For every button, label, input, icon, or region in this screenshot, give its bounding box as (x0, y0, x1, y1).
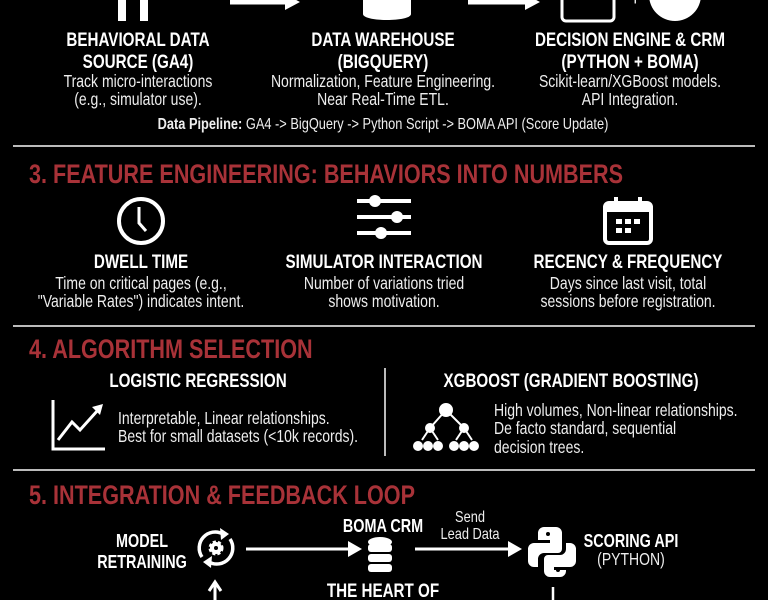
text: BOMA CRM (343, 516, 423, 536)
arrows and icons (246, 527, 576, 600)
text: Days since last visit, total (550, 273, 706, 293)
text: (PYTHON) (597, 549, 665, 569)
text: DECISION ENGINE & CRM (535, 30, 725, 51)
text: Best for small datasets (<10k records). (118, 426, 358, 446)
panel: pipeline stages (64, 30, 725, 109)
text: (e.g., simulator use). (74, 89, 202, 109)
heading: section 5: 5. INTEGRATION & FEEDBACK LOOP (29, 480, 415, 510)
text: LOGISTIC REGRESSION (109, 371, 287, 392)
text: Lead Data (440, 526, 500, 543)
text: De facto standard, sequential (494, 418, 676, 438)
text: Near Real-Time ETL. (317, 89, 449, 109)
text: sessions before registration. (540, 291, 716, 311)
text: Normalization, Feature Engineering. (271, 71, 495, 91)
text: MODEL (116, 531, 168, 551)
icon: retraining cycle (198, 528, 234, 600)
text: Time on critical pages (e.g., (55, 273, 227, 293)
icon: sliders (357, 195, 411, 239)
text: (BIGQUERY) (338, 52, 428, 73)
text: DATA WAREHOUSE (311, 30, 455, 51)
text: Number of variations tried (304, 273, 464, 293)
text: shows motivation. (328, 291, 440, 311)
text: BEHAVIORAL DATA (66, 30, 210, 51)
text: SCORING API (584, 531, 678, 551)
icon: clock (117, 197, 165, 245)
text: decision trees. (494, 437, 584, 457)
panel: logistic regression (52, 371, 358, 450)
panel: feedback loop diagram (97, 509, 678, 600)
icon: calendar (603, 197, 653, 245)
panel: features (38, 252, 722, 311)
text: API Integration. (582, 89, 678, 109)
text: Interpretable, Linear relationships. (118, 408, 330, 428)
text: High volumes, Non-linear relationships. (494, 400, 738, 420)
text: Scikit-learn/XGBoost models. (539, 71, 721, 91)
text: Track micro-interactions (64, 71, 212, 91)
text: XGBOOST (GRADIENT BOOSTING) (443, 371, 699, 392)
text: (PYTHON + BOMA) (561, 52, 699, 73)
heading: section 3: 3. FEATURE ENGINEERING: BEHAVIORS INTO NUMBERS (29, 159, 623, 189)
text: data pipeline: Data Pipeline: GA4 -> BigQuery -> Python Script -> BOMA API (Score Update) (158, 116, 608, 133)
text: RECENCY & FREQUENCY (534, 252, 722, 273)
icon: arrows top (118, 0, 700, 22)
text: Send (455, 509, 485, 526)
text: "Variable Rates") indicates intent. (38, 291, 244, 311)
heading: section 4: 4. ALGORITHM SELECTION (29, 334, 313, 364)
text: SIMULATOR INTERACTION (285, 252, 483, 273)
text: RETRAINING (97, 552, 187, 572)
text: SOURCE (GA4) (83, 52, 193, 73)
text: DWELL TIME (94, 252, 188, 273)
panel: xgboost (413, 371, 738, 457)
